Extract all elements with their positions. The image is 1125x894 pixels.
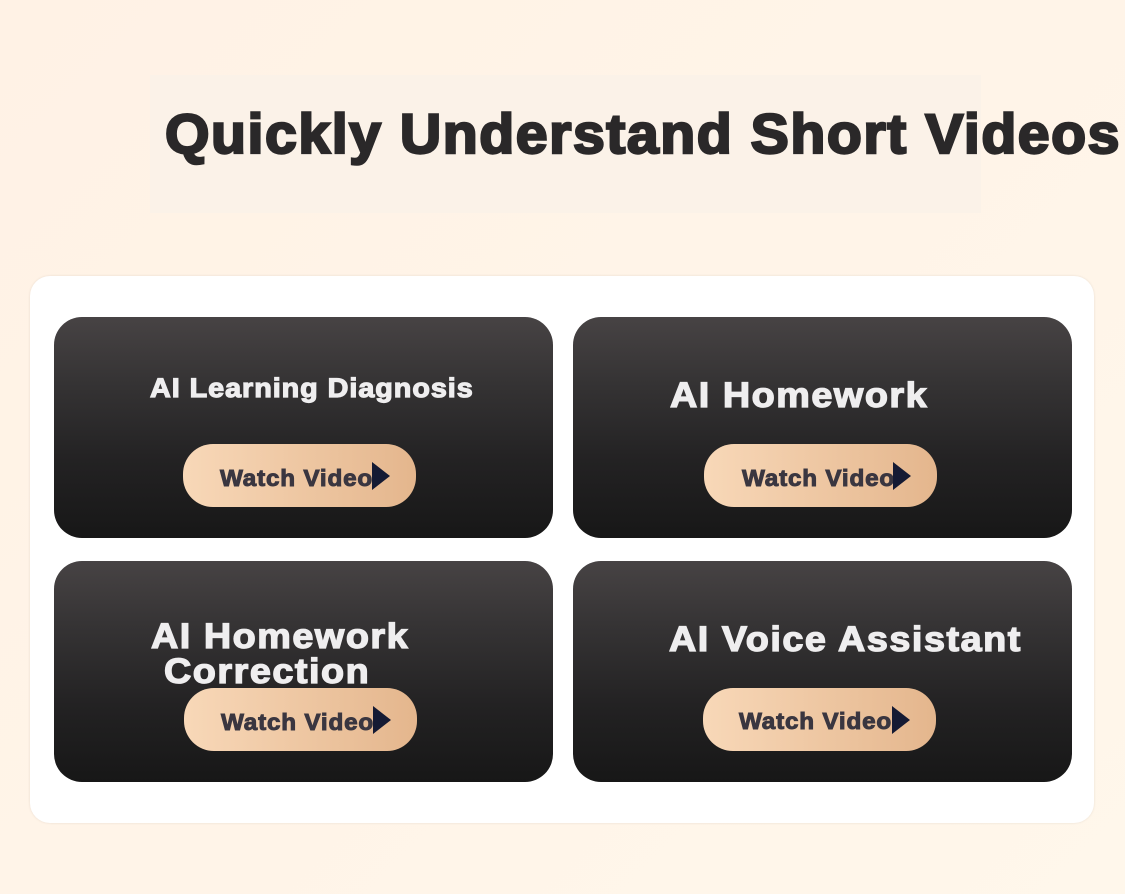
button label: Watch Video xyxy=(739,708,892,734)
title: Quickly Understand Short Videos xyxy=(165,102,1121,165)
card heading: AI Voice Assistant xyxy=(669,620,1022,659)
button: watch video xyxy=(704,444,937,507)
panel: video cards xyxy=(30,276,1094,823)
button label: Watch Video xyxy=(220,465,373,491)
card: AI Homework xyxy=(573,317,1072,538)
title backdrop xyxy=(150,75,981,213)
button: watch video xyxy=(703,688,936,751)
card: AI Homework Correction xyxy=(54,561,552,782)
icon: play arrow xyxy=(373,706,391,734)
card heading: Correction xyxy=(164,652,370,691)
card heading: AI Learning Diagnosis xyxy=(150,373,474,403)
icon: play arrow xyxy=(893,462,911,490)
card: AI Voice Assistant xyxy=(573,561,1072,782)
button label: Watch Video xyxy=(221,709,374,735)
icon: play arrow xyxy=(892,706,910,734)
card heading xyxy=(151,617,409,691)
icon: play arrow xyxy=(372,462,390,490)
button: watch video xyxy=(183,444,416,507)
card heading: AI Homework xyxy=(151,617,409,656)
card heading: AI Homework xyxy=(670,376,928,415)
card: AI Learning Diagnosis xyxy=(54,317,552,538)
button: watch video xyxy=(184,688,417,751)
button label: Watch Video xyxy=(742,465,895,491)
